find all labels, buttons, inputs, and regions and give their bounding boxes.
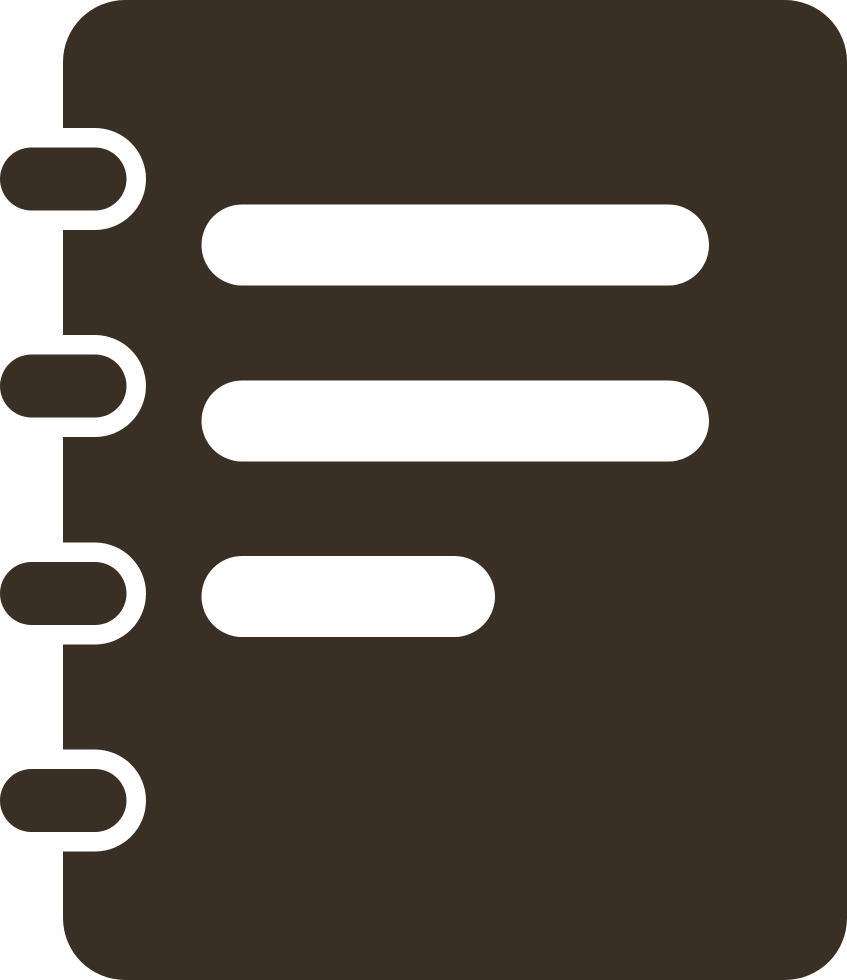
ring 1 bbox=[0, 128, 146, 230]
line 3 bbox=[202, 556, 495, 637]
line 2 bbox=[202, 380, 709, 462]
text lines bbox=[202, 204, 709, 637]
binding rings bbox=[0, 128, 146, 852]
ring 4 bbox=[0, 750, 146, 852]
line 1 bbox=[202, 204, 709, 286]
ring 2 bbox=[0, 335, 146, 437]
ring 3 bbox=[0, 542, 146, 644]
